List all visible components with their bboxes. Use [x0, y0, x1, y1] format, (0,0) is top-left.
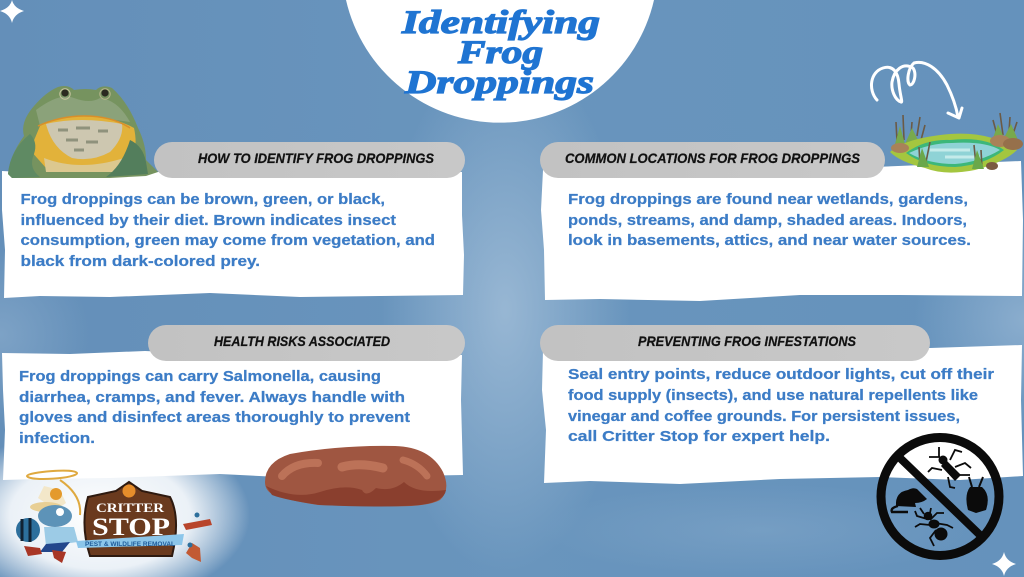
body text: common locations: look in basements, attics, and near water sources. — [568, 232, 971, 249]
body text: how to identify: Frog droppings can be brown, green, or black, — [20, 191, 385, 208]
title badge — [346, 0, 654, 123]
title: Identifying — [401, 5, 600, 41]
body text: common locations: ponds, streams, and damp, shaded areas. Indoors, — [568, 212, 967, 229]
body text: preventing infestations: vinegar and coffee grounds. For persistent issues, — [568, 408, 960, 425]
logo: Critter Stop: STOP — [92, 514, 170, 541]
body text: preventing infestations — [568, 366, 994, 445]
heading pill: preventing infestations: PREVENTING FROG INFESTATIONS — [638, 333, 857, 349]
body text: preventing infestations: Seal entry points, reduce outdoor lights, cut off their — [568, 366, 994, 383]
icon: pond — [890, 113, 1023, 173]
banner: PEST & WILDLIFE REMOVAL — [85, 541, 175, 548]
heading pill: how to identify — [154, 142, 465, 178]
title: Frog — [457, 35, 543, 71]
panel: how to identify — [2, 171, 464, 298]
icon: no pests sign — [881, 438, 999, 556]
logo: Critter Stop — [16, 471, 212, 563]
body text: common locations — [568, 191, 971, 249]
heading pill: how to identify: HOW TO IDENTIFY FROG DROPPINGS — [198, 150, 435, 166]
body text: common locations: Frog droppings are found near wetlands, gardens, — [568, 191, 968, 208]
icon: frog — [8, 86, 158, 178]
heading pill: health risks: HEALTH RISKS ASSOCIATED — [214, 333, 390, 349]
body text: preventing infestations: call Critter Stop for expert help. — [568, 428, 830, 445]
panel: preventing infestations — [542, 345, 1023, 484]
title: Droppings — [404, 65, 594, 101]
panel: common locations — [541, 161, 1023, 301]
body text: how to identify — [20, 191, 435, 270]
banner — [76, 534, 184, 548]
body text: health risks — [19, 368, 410, 447]
body text: health risks: gloves and disinfect areas thoroughly to prevent — [19, 409, 410, 426]
wood sign — [84, 482, 176, 556]
raccoon mascot — [16, 486, 78, 563]
body text: how to identify: black from dark-colored prey. — [20, 253, 260, 270]
body text: health risks: diarrhea, cramps, and fever. Always handle with — [19, 389, 405, 406]
body text: how to identify: consumption, green may come from vegetation, and — [20, 232, 435, 249]
body text: health risks: Frog droppings can carry Salmonella, causing — [19, 368, 381, 385]
pest: cockroach — [928, 447, 971, 488]
rope — [27, 471, 80, 515]
heading pill: common locations — [540, 142, 885, 178]
heading pill: health risks — [148, 325, 465, 361]
pest: mouse — [892, 488, 927, 512]
icon: sparkle top left — [0, 0, 24, 23]
panel: health risks — [2, 351, 463, 480]
sign text: CRITTER — [96, 500, 165, 515]
icon: sparkle bottom right — [992, 552, 1016, 576]
bug mascots — [183, 512, 212, 562]
body text: health risks: infection. — [19, 430, 95, 447]
pest: ant — [915, 508, 953, 546]
heading pill: preventing infestations — [540, 325, 930, 361]
heading pill: common locations: COMMON LOCATIONS FOR FROG DROPPINGS — [565, 150, 861, 166]
icon: frog dropping — [265, 446, 446, 506]
title — [401, 5, 600, 101]
pest: beetle — [966, 477, 988, 513]
body text: how to identify: influenced by their diet. Brown indicates insect — [20, 212, 396, 229]
body text: preventing infestations: food supply (insects), and use natural repellents like — [568, 387, 978, 404]
arrow: curly — [871, 62, 962, 118]
